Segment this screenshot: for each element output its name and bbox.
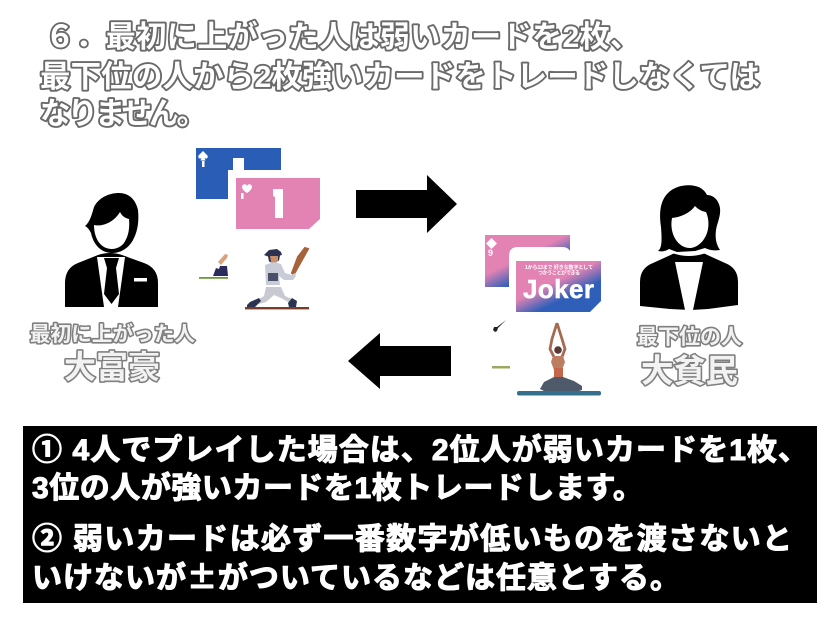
note 1: 3位の人が強いカードを1枚トレードします。: [32, 471, 643, 505]
title: [40, 20, 760, 131]
label: first winner: 大富豪: [64, 349, 160, 385]
note 1: [32, 433, 808, 505]
note 2: いけないが±がついているなどは任意とする。: [32, 553, 680, 597]
label: first winner: 最初に上がった人: [30, 322, 196, 346]
cards: diamond 9 and joker: 1から13まで 好きな数字として: [525, 264, 593, 271]
icon: businesswoman: [640, 185, 738, 310]
illustration: baseball batter: [199, 248, 309, 309]
cards: diamond 9 and joker: Joker: [523, 274, 594, 304]
cards: diamond 9 and joker: [485, 235, 601, 316]
title: なりません。: [40, 97, 207, 131]
cards: weak spade 1 and heart 1: [196, 148, 320, 230]
label: lowest player: 最下位の人: [637, 326, 742, 349]
label: lowest player: 大貧民: [641, 353, 738, 389]
label: lowest player: [637, 326, 742, 389]
illustration: yoga pose: [492, 320, 601, 396]
note 1: ① 4人でプレイした場合は、2位人が弱いカードを1枚、: [32, 433, 808, 467]
panel: notes: [23, 426, 817, 603]
cards: diamond 9 and joker: 9: [488, 248, 493, 258]
note 2: ② 弱いカードは必ず一番数字が低いものを渡さないと: [32, 522, 792, 556]
cards: diamond 9 and joker: つかうことができる: [538, 270, 580, 276]
note 2: [32, 522, 792, 597]
title: ６．最初に上がった人は弱いカードを2枚、: [45, 20, 640, 54]
label: first winner: [30, 322, 196, 385]
title: 最下位の人から2枚強いカードをトレードしなくては: [40, 60, 760, 94]
icon: businessman: [65, 193, 158, 307]
arrow: left: [348, 333, 451, 389]
arrow: right: [356, 175, 457, 233]
